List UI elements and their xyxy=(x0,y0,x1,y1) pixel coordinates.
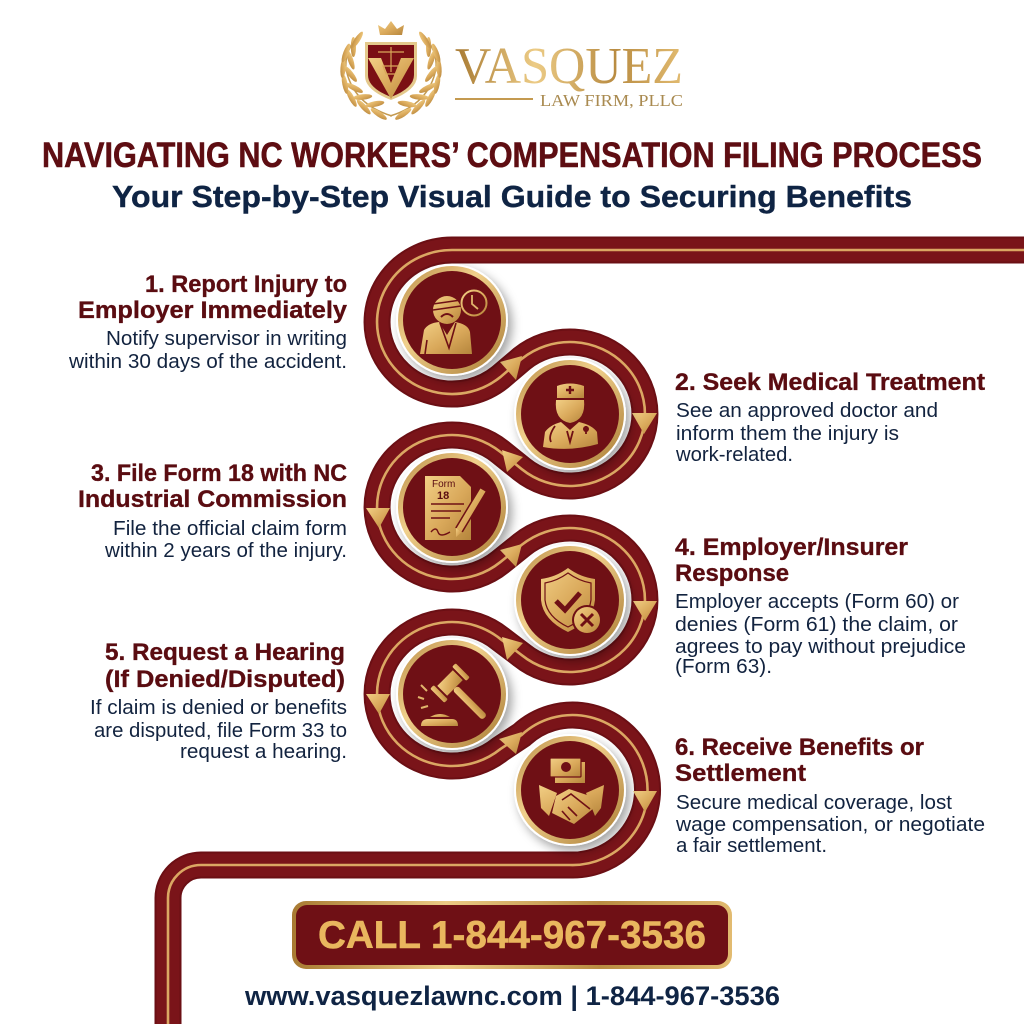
icon: doctor xyxy=(543,384,598,449)
call to action button: CALL 1-844-967-3536 xyxy=(318,914,706,957)
step 5 medallion: gavel xyxy=(396,638,508,750)
logo subline: LAW FIRM, PLLC xyxy=(540,91,683,110)
step 3 text xyxy=(78,460,347,562)
step 4 heading xyxy=(675,534,908,587)
icon: shield with check and cross xyxy=(541,568,602,635)
footer contact line: www.vasquezlawnc.com | 1-844-967-3536 xyxy=(244,981,780,1011)
step 1 heading xyxy=(78,271,348,324)
step 2 text xyxy=(675,369,985,466)
step 3 description xyxy=(104,518,347,562)
winding ribbon path xyxy=(168,250,1024,1024)
step 5 heading xyxy=(105,639,345,693)
step 2 heading: 2. Seek Medical Treatment xyxy=(675,369,985,396)
step 5 heading: 5. Request a Hearing xyxy=(105,639,345,666)
step 4 description: agrees to pay without prejudice xyxy=(675,636,966,658)
step 2 description: work-related. xyxy=(675,444,793,466)
step 1 text xyxy=(68,271,348,373)
icon: injured person with clock xyxy=(420,290,486,354)
step 3 medallion: form 18 xyxy=(396,451,508,563)
icon: form and pen: Form xyxy=(432,479,455,490)
step 3 heading xyxy=(78,460,347,513)
step 3 heading: Industrial Commission xyxy=(78,486,347,513)
arrows along the path xyxy=(366,356,657,812)
step 3 heading: 3. File Form 18 with NC xyxy=(91,460,347,487)
step 6 heading: Settlement xyxy=(675,760,806,787)
step 6 description: a fair settlement. xyxy=(676,835,827,857)
step 6 description xyxy=(675,792,985,857)
step 1 description xyxy=(68,328,347,373)
step 4 description: (Form 63). xyxy=(675,656,772,678)
logo xyxy=(340,21,683,122)
icon: gavel xyxy=(418,663,497,730)
step 2 medallion: doctor xyxy=(514,358,626,470)
step 5 description xyxy=(90,697,347,763)
step 6 heading: 6. Receive Benefits or xyxy=(675,734,924,761)
step 1 description: Notify supervisor in writing xyxy=(106,328,347,350)
step 1 description: within 30 days of the accident. xyxy=(68,351,347,373)
step 4 description: Employer accepts (Form 60) or xyxy=(675,591,959,613)
step 4 description: denies (Form 61) the claim, or xyxy=(675,614,958,636)
step 5 text xyxy=(90,639,347,763)
icon: form and pen xyxy=(425,476,483,540)
step 5 description: request a hearing. xyxy=(180,741,347,763)
icon: form and pen: 18 xyxy=(437,490,449,502)
step 4 medallion: shield xyxy=(514,544,626,656)
step 4 text xyxy=(675,534,966,678)
step 2 description xyxy=(675,400,938,466)
step 1 heading: Employer Immediately xyxy=(78,297,348,324)
step 3 description: within 2 years of the injury. xyxy=(104,540,347,562)
step 6 heading xyxy=(675,734,924,787)
step 4 heading: Response xyxy=(675,560,789,587)
step 6 description: Secure medical coverage, lost xyxy=(676,792,952,814)
call to action button xyxy=(292,901,732,969)
step 3 description: File the official claim form xyxy=(113,518,347,540)
step 5 heading: (If Denied/Disputed) xyxy=(105,666,345,693)
step 6 description: wage compensation, or negotiate xyxy=(675,814,985,836)
step 5 description: If claim is denied or benefits xyxy=(90,697,347,719)
step 4 description xyxy=(675,591,966,678)
icon: money and handshake xyxy=(539,758,604,824)
subtitle: Your Step-by-Step Visual Guide to Securing Benefits xyxy=(112,179,912,214)
step 1 heading: 1. Report Injury to xyxy=(145,271,347,298)
step 5 description: are disputed, file Form 33 to xyxy=(94,720,347,742)
step 4 heading: 4. Employer/Insurer xyxy=(675,534,908,561)
step 2 description: inform them the injury is xyxy=(676,423,899,445)
step 6 text xyxy=(675,734,985,857)
step 2 description: See an approved doctor and xyxy=(676,400,938,422)
step 1 medallion: injured worker xyxy=(396,264,508,376)
logo wordmark: VASQUEZ xyxy=(455,38,683,95)
icon: law firm crest xyxy=(340,21,442,122)
step 6 medallion: settlement xyxy=(514,734,626,846)
